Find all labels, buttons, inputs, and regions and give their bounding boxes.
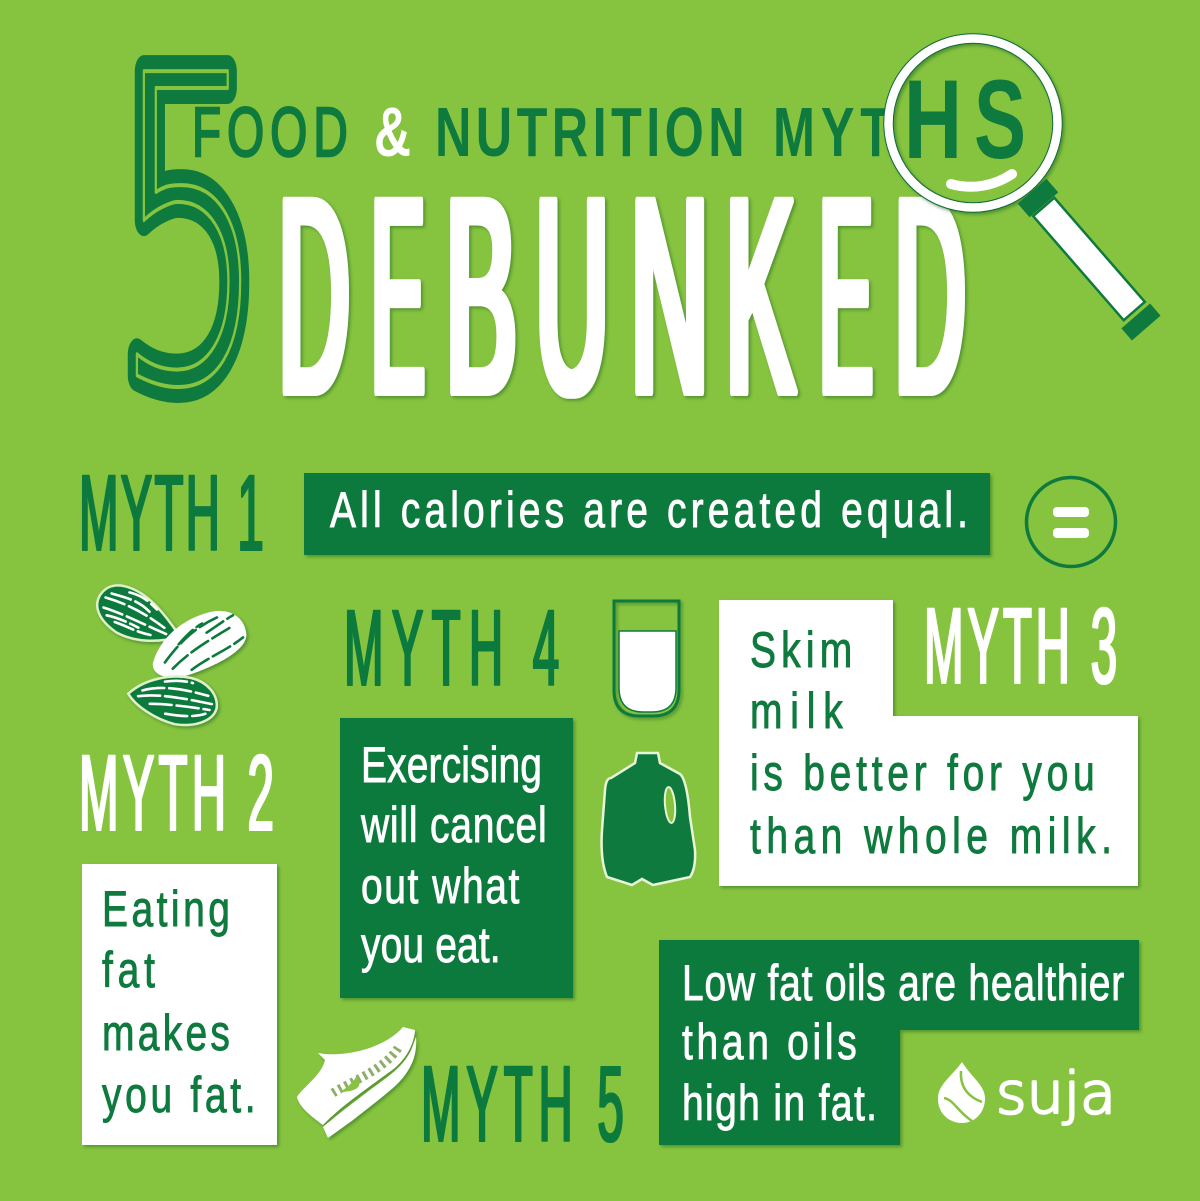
panel: myth 3 statement: milk <box>750 682 843 739</box>
lens glint <box>951 174 1012 187</box>
magnified letters: H <box>904 57 962 182</box>
heading: food and nutrition myths: & <box>374 93 411 171</box>
heading: debunked: E <box>372 141 424 452</box>
label: myth 4: MYTH 4 <box>344 587 559 708</box>
magnified letters: S <box>974 57 1026 182</box>
handle collar <box>1018 179 1058 217</box>
icon: magnifying glass <box>888 38 1161 341</box>
icon: equals sign <box>1026 478 1116 566</box>
icon: glass of milk <box>614 601 679 716</box>
icon: milk jug <box>602 753 695 885</box>
panel: myth 5 statement: than oils <box>682 1013 857 1070</box>
label: myth 3: MYTH 3 <box>924 585 1117 706</box>
label: myth 5: MYTH 5 <box>421 1043 624 1164</box>
shoe mesh <box>333 1048 398 1093</box>
shoe swoosh <box>340 1077 359 1092</box>
shoe upper <box>297 1027 415 1125</box>
panel: myth 3 statement <box>719 600 1138 886</box>
panel: myth 2 statement: you fat. <box>102 1066 256 1123</box>
heading: food and nutrition myths: FOOD <box>192 93 348 171</box>
numeral 5: 5 <box>113 0 267 482</box>
heading: food and nutrition myths: MYT <box>773 93 891 171</box>
panel: myth 3 statement: Skim <box>750 621 852 678</box>
panel: myth 5 statement: Low fat oils are healthier <box>682 954 1124 1011</box>
logo drop <box>938 1062 985 1123</box>
panel: myth 2 statement <box>82 864 277 1145</box>
lens ring <box>888 38 1058 208</box>
panel: myth 4 statement: out what <box>361 857 520 914</box>
magnified letters <box>904 57 1026 182</box>
heading: debunked <box>279 140 965 452</box>
shoe sole <box>323 1037 416 1138</box>
logo: suja <box>938 1061 1116 1127</box>
label: myth 2: MYTH 2 <box>79 732 274 853</box>
icon: running shoe <box>297 1027 416 1138</box>
panel: myth 5 statement: high in fat. <box>682 1074 877 1131</box>
panel: myth 1 statement: All calories are created equal. <box>330 481 968 538</box>
heading: debunked: K <box>726 141 795 452</box>
panel: myth 3 statement: is better for you <box>750 744 1095 801</box>
heading: debunked: E <box>820 141 872 452</box>
panel: myth 2 statement: makes <box>102 1004 230 1061</box>
icon: almonds <box>89 578 253 727</box>
panel: myth 2 statement: fat <box>102 941 156 998</box>
panel: myth 4 statement: will cancel <box>360 796 547 853</box>
panel: myth 5 statement <box>659 940 1139 1145</box>
panel: myth 4 statement: Exercising <box>361 736 542 793</box>
panel: myth 4 statement: you eat. <box>361 916 501 973</box>
panel: myth 2 statement: Eating <box>102 880 230 937</box>
label: myth 1: MYTH 1 <box>79 452 264 573</box>
handle <box>1033 198 1145 320</box>
heading: debunked: D <box>279 141 349 452</box>
heading: debunked: U <box>536 142 608 452</box>
panel: myth 3 statement: than whole milk. <box>750 807 1112 864</box>
heading: food and nutrition myths: NUTRITION <box>435 93 745 171</box>
heading: debunked: B <box>446 141 516 451</box>
numeral 5: 5 <box>113 0 267 482</box>
heading: debunked: N <box>631 140 708 451</box>
panel: myth 4 statement <box>340 718 573 998</box>
logo wordmark: suja <box>996 1061 1116 1127</box>
heading: food and nutrition myths <box>192 93 891 171</box>
handle end cap <box>1121 303 1161 341</box>
heading: debunked: D <box>895 141 965 452</box>
panel: myth 1 statement <box>304 473 990 555</box>
